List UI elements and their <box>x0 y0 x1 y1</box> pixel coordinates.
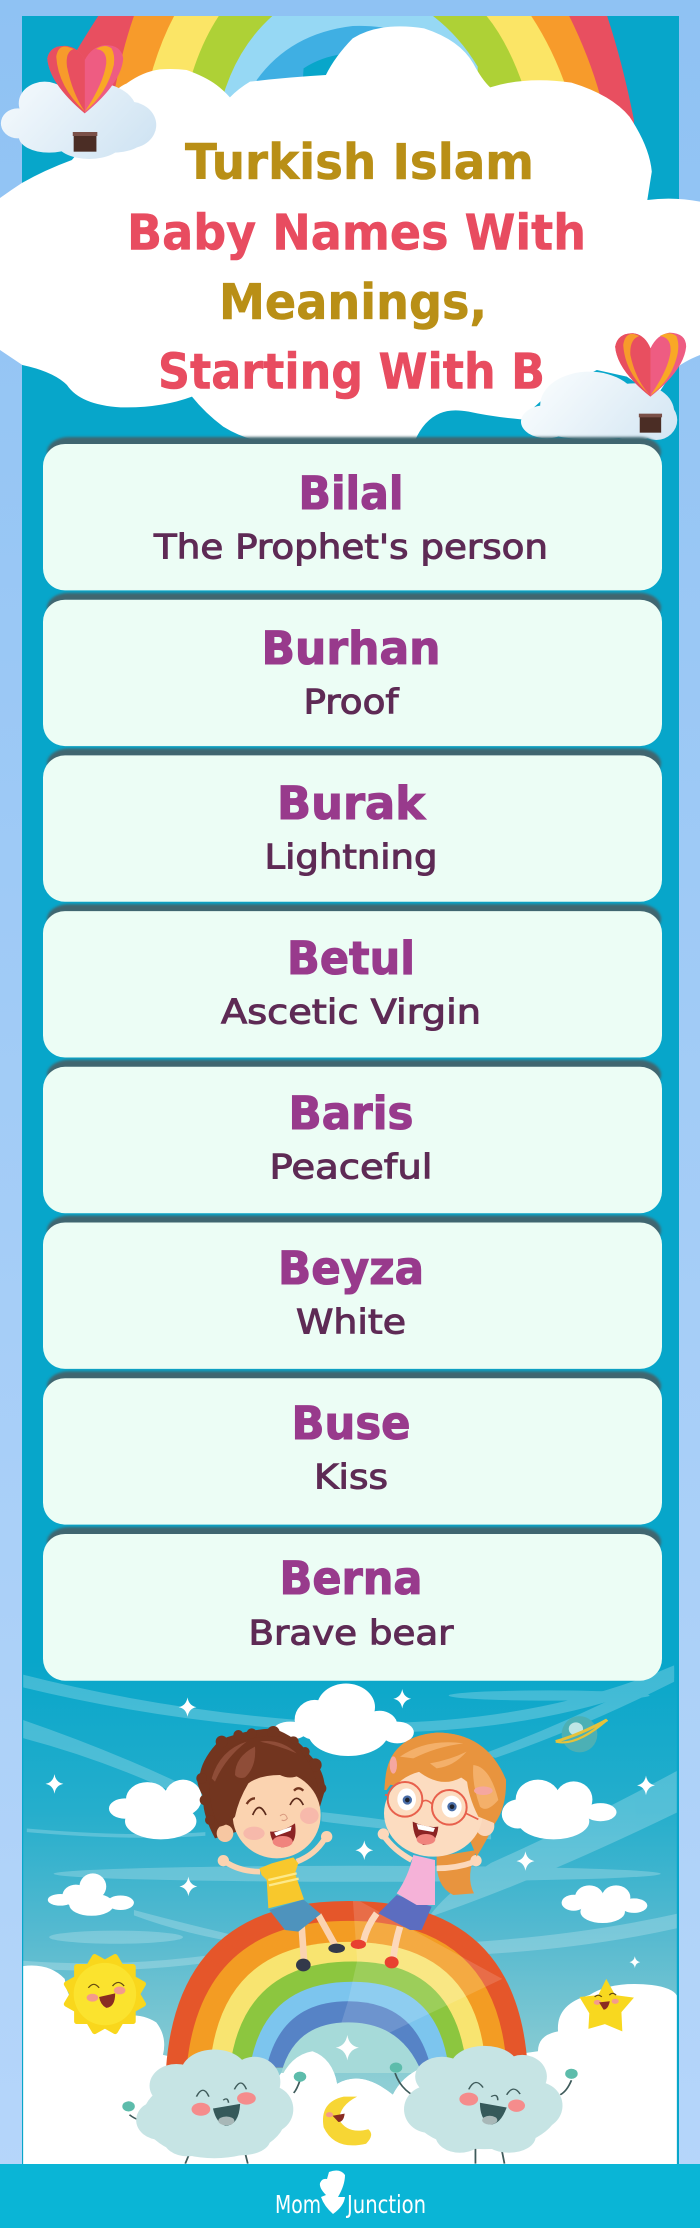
MomJunction logo: Mom <box>275 2190 321 2219</box>
card: Baris: Peaceful <box>270 1148 432 1188</box>
moon <box>323 2097 371 2145</box>
small left cloud <box>48 1873 134 1916</box>
card: Buse <box>43 1371 662 1525</box>
main title cloud <box>0 26 700 445</box>
rainbow <box>166 1897 528 2131</box>
card: Burak: Lightning <box>264 838 438 878</box>
bottom illustration: sky scene <box>22 1660 678 2164</box>
name cards <box>43 437 662 1681</box>
planet <box>556 1716 607 1752</box>
left cloud <box>109 1780 202 1839</box>
card: Berna <box>43 1527 662 1681</box>
card: Berna: Brave bear <box>248 1614 454 1654</box>
small left cloud <box>1 82 156 159</box>
card: Burhan <box>43 593 662 746</box>
card: Beyza <box>43 1216 662 1369</box>
kids on the rainbow <box>196 1726 506 1971</box>
sun <box>63 1953 147 2035</box>
ground clouds <box>22 1966 678 2164</box>
card: Burhan: Burhan <box>262 622 440 675</box>
card: Bilal: Bilal <box>298 467 404 520</box>
card: Buse: Kiss <box>314 1458 388 1498</box>
card: Buse: Buse <box>292 1397 410 1450</box>
left smiling cloud <box>122 2049 306 2164</box>
right smiling cloud <box>390 2046 578 2164</box>
card: Beyza: Beyza <box>278 1242 424 1295</box>
card: Burhan: Proof <box>304 682 400 722</box>
title: Meanings, <box>219 274 487 331</box>
white clouds <box>48 1684 647 1923</box>
footer bar <box>0 2164 700 2228</box>
right heart balloon <box>615 333 686 433</box>
card: Berna: Berna <box>280 1552 422 1605</box>
small right cloud <box>562 1885 647 1923</box>
card: Beyza: White <box>296 1302 406 1342</box>
card: Burak <box>43 748 662 902</box>
right cloud <box>502 1780 617 1839</box>
MomJunction logo <box>275 2171 426 2219</box>
title: Baby Names With <box>127 204 586 262</box>
sky <box>23 1660 677 2164</box>
card: Betul <box>43 904 662 1058</box>
title: Starting With B <box>158 344 545 400</box>
MomJunction logo: Junction <box>345 2190 426 2219</box>
small right cloud <box>521 372 677 440</box>
wispy streaks <box>22 1665 678 1971</box>
title <box>127 134 586 400</box>
star <box>579 1979 634 2031</box>
card: Bilal <box>43 437 662 590</box>
left heart balloon <box>47 45 123 152</box>
card: Betul: Ascetic Virgin <box>221 992 481 1032</box>
card: Baris: Baris <box>288 1087 414 1140</box>
card: Baris <box>43 1060 662 1213</box>
card: Bilal: The Prophet's person <box>153 528 548 568</box>
header illustration: rainbow and clouds <box>0 16 700 445</box>
card: Burak: Burak <box>277 777 426 830</box>
sparkles <box>46 1689 655 2060</box>
boy <box>196 1726 345 1971</box>
title: Turkish Islam <box>185 134 534 191</box>
card: Betul: Betul <box>287 932 415 985</box>
rainbow arc <box>67 16 634 140</box>
girl <box>351 1733 506 1968</box>
top center cloud <box>273 1684 414 1756</box>
